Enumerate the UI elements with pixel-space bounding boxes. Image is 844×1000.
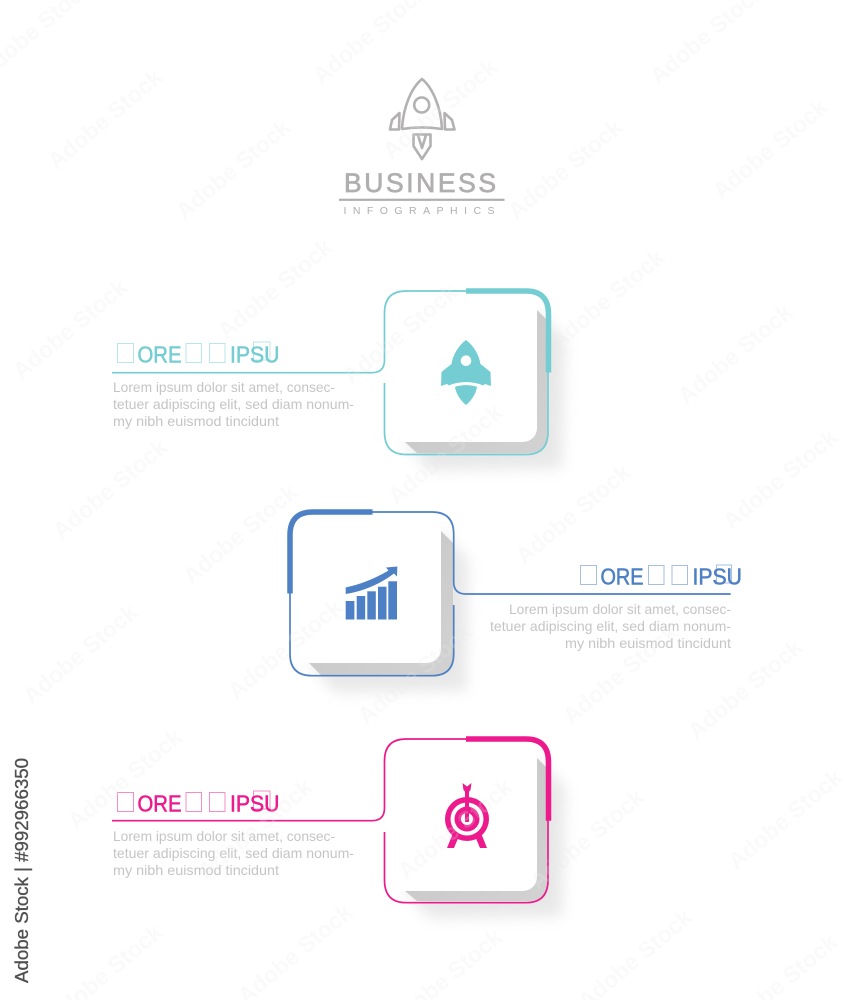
background watermark pattern: Adobe Stock (18, 599, 142, 709)
panel: step 1 teal (112, 291, 565, 470)
description: Lorem ipsum dolor sit amet, consec- (113, 379, 335, 395)
description (490, 601, 731, 651)
description: tetuer adipiscing elit, sed diam nonum- (490, 618, 731, 634)
stock credit vertical text: Adobe Stock | #992966350 (12, 758, 32, 983)
background watermark pattern: Adobe Stock (673, 299, 797, 409)
heading: IPSU (230, 341, 280, 367)
background watermark pattern: Adobe Stock (708, 94, 832, 204)
heading (118, 791, 280, 817)
logo subtitle: INFOGRAPHICS (344, 205, 494, 217)
background watermark pattern: Adobe Stock (558, 619, 682, 729)
card shadow (405, 758, 565, 918)
background watermark pattern: Adobe Stock (8, 274, 132, 384)
background watermark pattern: Adobe Stock (545, 244, 669, 354)
card shadow (309, 531, 468, 692)
background watermark pattern: Adobe Stock (723, 764, 844, 874)
description: Lorem ipsum dolor sit amet, consec- (509, 601, 731, 617)
heading: IPSU (692, 563, 742, 589)
background watermark pattern: Adobe Stock (383, 399, 507, 509)
outline and leader line (290, 512, 731, 676)
logo title: BUSINESS (344, 168, 496, 198)
logo: business infographics (339, 79, 504, 217)
heading: IPSU (230, 791, 280, 817)
background watermark pattern: Adobe Stock (718, 424, 842, 534)
icon: rocket (441, 340, 491, 405)
background watermark pattern: Adobe Stock (171, 114, 295, 224)
description: my nibh euismod tincidunt (565, 635, 731, 651)
heading (118, 341, 280, 367)
background watermark pattern: Adobe Stock (503, 114, 627, 224)
panel: step 3 pink (112, 739, 565, 918)
heading: ORE (138, 791, 182, 817)
thick corner accent (466, 739, 548, 821)
icon: growth chart (346, 566, 397, 620)
thick corner accent (466, 291, 548, 372)
outline and leader line (112, 291, 548, 454)
card (388, 296, 537, 442)
background watermark pattern: Adobe Stock (378, 54, 502, 164)
background watermark pattern: Adobe Stock (213, 234, 337, 344)
description: my nibh euismod tincidunt (113, 413, 279, 429)
background watermark pattern: Adobe Stock (178, 479, 302, 589)
background watermark pattern: Adobe Stock (48, 434, 172, 544)
background watermark pattern: Adobe Stock (223, 594, 347, 704)
background watermark pattern: Adobe Stock (193, 774, 317, 884)
heading: ORE (138, 341, 182, 367)
description: tetuer adipiscing elit, sed diam nonum- (113, 845, 354, 861)
icon: target with arrow (445, 783, 489, 848)
card (292, 516, 441, 663)
card shadow (405, 310, 565, 470)
card (388, 744, 537, 891)
description: tetuer adipiscing elit, sed diam nonum- (113, 396, 354, 412)
background watermark pattern: Adobe Stock (683, 634, 807, 744)
description: Lorem ipsum dolor sit amet, consec- (113, 828, 335, 844)
background watermark pattern: Adobe Stock (511, 459, 635, 569)
description (113, 379, 354, 429)
icon: outline rocket (390, 79, 454, 159)
panel: step 2 blue (290, 512, 742, 692)
background watermark pattern: Adobe Stock (353, 619, 477, 729)
background watermark pattern: Adobe Stock (393, 774, 517, 884)
background watermark pattern: Adobe Stock (525, 784, 649, 894)
thick corner accent (290, 512, 372, 594)
description: my nibh euismod tincidunt (113, 862, 279, 878)
outline and leader line (112, 739, 548, 903)
heading (580, 563, 742, 589)
background watermark pattern: Adobe Stock (338, 279, 462, 389)
heading: ORE (600, 563, 644, 589)
background watermark pattern: Adobe Stock (43, 64, 167, 174)
background watermark pattern: Adobe Stock (63, 724, 187, 834)
description (113, 828, 354, 878)
